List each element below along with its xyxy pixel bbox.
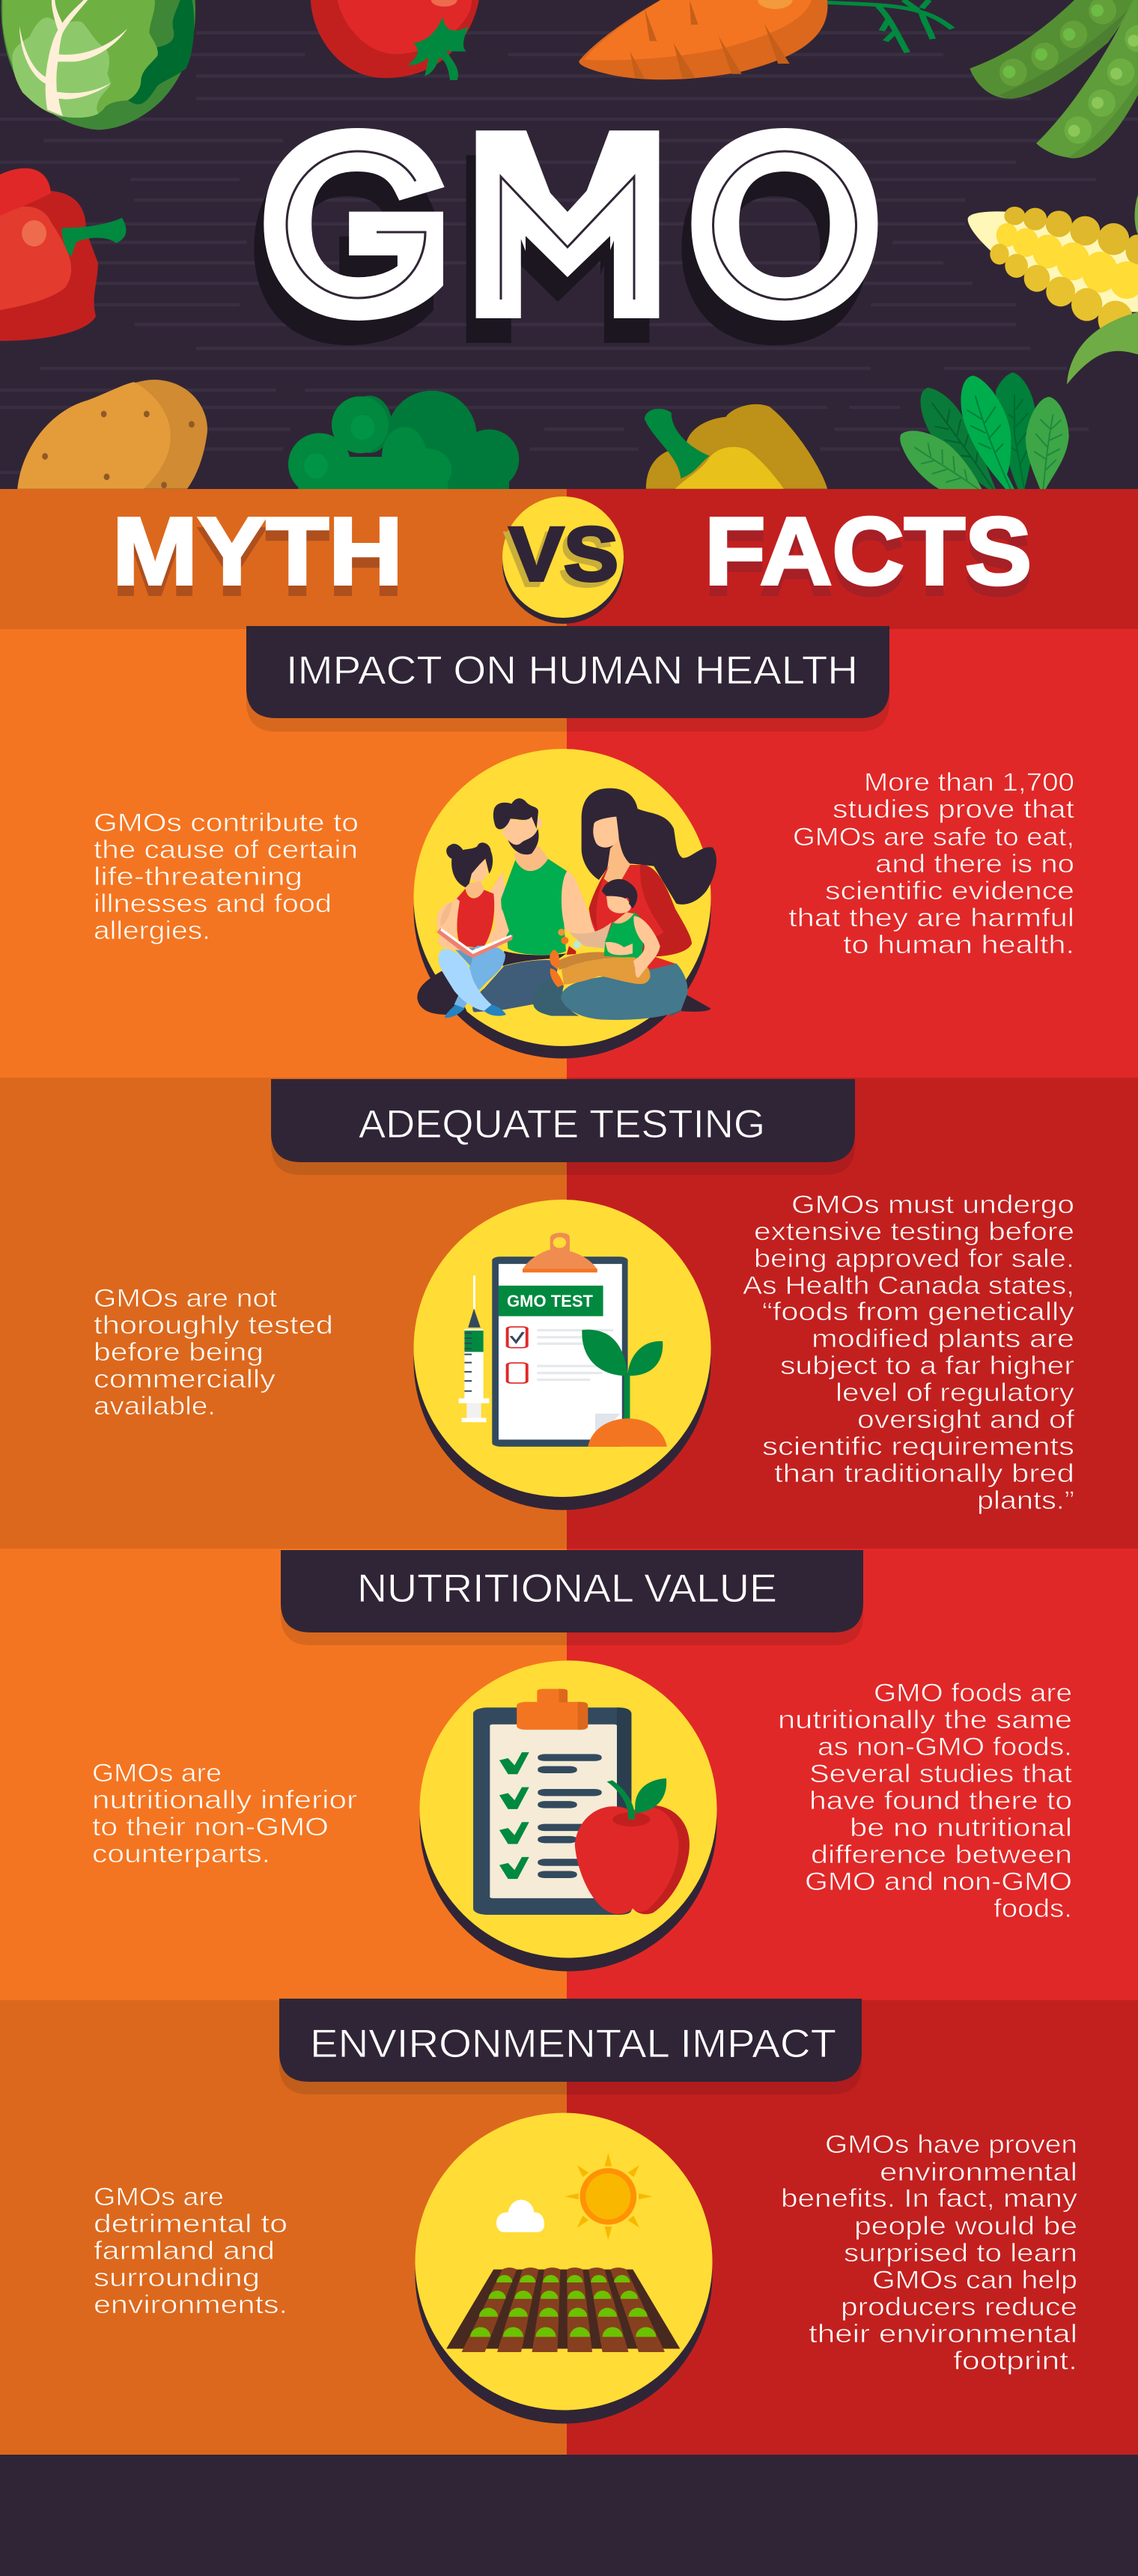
myth text: GMOs contribute to	[94, 809, 359, 837]
myth text: available.	[94, 1392, 216, 1421]
myth text: allergies.	[94, 917, 210, 945]
icon: carrot	[579, 0, 952, 79]
fact text: their environmental	[809, 2320, 1077, 2348]
panel: myth vs facts banner	[0, 489, 1138, 629]
icon: potato	[17, 380, 207, 489]
myth text: life-threatening	[94, 863, 302, 891]
fact text: scientific evidence	[825, 877, 1074, 905]
panel: nutritional value	[0, 1549, 1138, 2000]
icon: broccoli	[288, 391, 519, 496]
fact text: Several studies that	[809, 1760, 1073, 1788]
fact text: have found there to	[809, 1787, 1072, 1815]
fact text: scientific requirements	[762, 1433, 1074, 1461]
fact text	[778, 1679, 1073, 1923]
fact text: oversight and of	[857, 1406, 1075, 1434]
icon: farm field with sun and cloud	[415, 2113, 713, 2423]
panel: hero header	[0, 0, 1138, 496]
fact text: GMO foods are	[874, 1679, 1072, 1707]
icon: tomato	[311, 0, 479, 80]
myth text	[94, 2183, 287, 2319]
fact text: benefits. In fact, many	[781, 2184, 1077, 2213]
panel: impact on human health	[0, 626, 1138, 1078]
myth text: GMOs are	[94, 2183, 224, 2211]
icon: red bell pepper	[0, 168, 127, 341]
myth text	[92, 1759, 357, 1868]
myth text: farmland and	[94, 2237, 275, 2265]
fact text: surprised to learn	[844, 2239, 1077, 2267]
heading: FACTS: FACTS	[705, 508, 1032, 616]
myth text	[94, 1284, 333, 1421]
myth text: the cause of certain	[94, 836, 358, 864]
myth text: thoroughly tested	[94, 1311, 333, 1340]
heading pill: NUTRITIONAL VALUE	[357, 1567, 777, 1611]
icon: GMO test clipboard	[413, 1200, 711, 1510]
fact text: level of regulatory	[836, 1379, 1074, 1407]
icon: yellow pepper	[645, 404, 827, 489]
myth text: nutritionally inferior	[92, 1786, 357, 1814]
fact text: GMOs can help	[872, 2266, 1077, 2294]
badge: VS: VS	[509, 511, 618, 597]
badge: VS: VS	[505, 517, 614, 602]
fact text: that they are harmful	[788, 904, 1074, 932]
fact text: producers reduce	[841, 2293, 1077, 2321]
fact text: environmental	[880, 2158, 1077, 2187]
fact text: GMO and non-GMO	[805, 1868, 1072, 1896]
fact text: modified plants are	[812, 1325, 1074, 1353]
heading pill: ADEQUATE TESTING	[359, 1102, 765, 1146]
fact text: plants.”	[977, 1486, 1074, 1515]
heading pill	[271, 1079, 855, 1162]
heading pill	[281, 1550, 863, 1632]
heading: FACTS: FACTS	[705, 498, 1032, 605]
label: GMO TEST: GMO TEST	[507, 1292, 594, 1310]
fact text	[743, 1191, 1075, 1515]
fact text: As Health Canada states,	[743, 1272, 1074, 1300]
fact text: More than 1,700	[864, 768, 1074, 797]
fact text: to human health.	[843, 931, 1074, 959]
fact text: and there is no	[875, 850, 1074, 878]
fact text: footprint.	[953, 2347, 1077, 2375]
icon: pea pods	[970, 0, 1138, 158]
fact text: GMOs must undergo	[791, 1191, 1074, 1219]
heading: MYTH: MYTH	[112, 498, 403, 605]
heading pill	[279, 1999, 862, 2082]
heading pill: ENVIRONMENTAL IMPACT	[310, 2022, 836, 2066]
fact text: be no nutritional	[850, 1814, 1072, 1842]
myth text: GMOs are not	[94, 1284, 278, 1313]
heading: MYTH: MYTH	[112, 508, 403, 616]
fact text: subject to a far higher	[780, 1352, 1074, 1380]
fact text: than traditionally bred	[774, 1459, 1074, 1488]
fact text: GMOs have proven	[825, 2130, 1077, 2159]
fact text: studies prove that	[833, 795, 1075, 824]
icon: nutrition checklist and apple	[419, 1661, 717, 1971]
fact text: nutritionally the same	[778, 1706, 1072, 1734]
panel: adequate testing	[0, 1078, 1138, 1549]
title: GMO: GMO	[264, 92, 877, 356]
fact text	[788, 768, 1075, 959]
title: GMO: GMO	[255, 117, 867, 380]
panel: environmental impact	[0, 1999, 1138, 2455]
myth text: commercially	[94, 1365, 276, 1394]
icon: spinach	[900, 372, 1069, 489]
icon: corn	[968, 195, 1138, 384]
myth text	[94, 809, 359, 945]
myth text: surrounding	[94, 2264, 260, 2292]
fact text: foods.	[994, 1895, 1072, 1923]
myth text: detrimental to	[94, 2210, 287, 2238]
fact text: GMOs are safe to eat,	[793, 823, 1074, 851]
fact text: being approved for sale.	[754, 1245, 1074, 1273]
icon: family circle	[413, 749, 716, 1059]
myth text: counterparts.	[92, 1840, 270, 1868]
myth text: environments.	[94, 2291, 287, 2319]
myth text: illnesses and food	[94, 890, 332, 918]
fact text	[781, 2130, 1077, 2375]
heading pill	[246, 626, 889, 718]
myth text: before being	[94, 1338, 264, 1367]
panel: footer band	[0, 2455, 1138, 2576]
heading pill: IMPACT ON HUMAN HEALTH	[286, 648, 858, 693]
badge: VS	[502, 496, 624, 624]
fact text: people would be	[854, 2212, 1077, 2241]
fact text: extensive testing before	[754, 1218, 1074, 1246]
fact text: as non-GMO foods.	[818, 1733, 1072, 1761]
myth text: to their non-GMO	[92, 1813, 329, 1841]
icon: cabbage	[1, 0, 195, 130]
fact text: difference between	[811, 1841, 1072, 1869]
fact text: “foods from genetically	[762, 1298, 1074, 1326]
myth text: GMOs are	[92, 1759, 222, 1787]
